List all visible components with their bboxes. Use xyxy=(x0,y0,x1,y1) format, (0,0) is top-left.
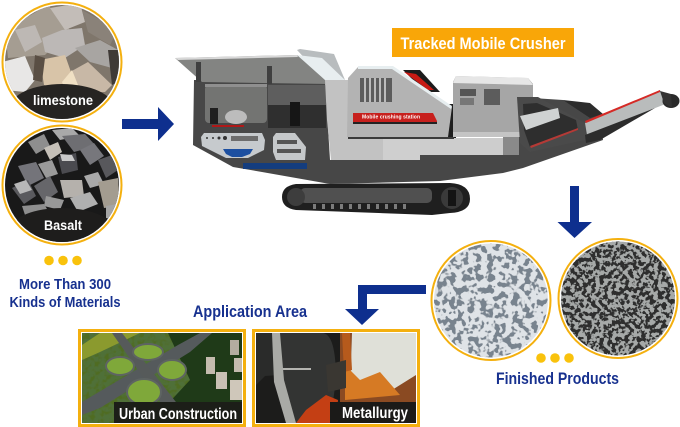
text: finished products: Finished Products xyxy=(496,369,619,388)
machine: chassis frame xyxy=(193,80,603,184)
arrow: products to application area xyxy=(345,285,426,325)
panel: urban construction xyxy=(80,330,244,426)
material: basalt xyxy=(2,126,122,248)
machine: tracked mobile crusher xyxy=(175,49,680,215)
material: limestone xyxy=(2,2,122,132)
machine: discharge housing xyxy=(517,97,603,152)
arrow: materials to crusher xyxy=(122,107,174,141)
text: more than 300 kinds of materials: More Than 300 xyxy=(19,276,111,293)
machine: feeder window xyxy=(205,84,326,128)
machine: central column xyxy=(325,80,383,160)
heading: application area: Application Area xyxy=(193,302,307,321)
text: more than 300 kinds of materials: Kinds of Materials xyxy=(10,294,120,311)
machine: dark gap behind housing xyxy=(444,104,456,140)
text: more than 300 kinds of materials xyxy=(10,276,120,311)
text: mobile crushing station: Mobile crushing station xyxy=(362,114,420,120)
title badge: tracked mobile crusher: Tracked Mobile Crusher xyxy=(400,34,566,53)
machine: hopper lid xyxy=(175,49,345,84)
label: metallurgy: Metallurgy xyxy=(342,405,408,422)
machine: lower covers xyxy=(348,137,519,160)
title badge: tracked mobile crusher xyxy=(392,28,574,57)
machine: engine enclosure xyxy=(453,76,533,137)
dots: more materials xyxy=(44,256,82,265)
product: dark gravel xyxy=(558,238,678,358)
dots: more products xyxy=(536,353,574,363)
machine: discharge conveyor xyxy=(585,90,680,143)
machine: red flywheel xyxy=(403,70,440,92)
arrow: crusher to products xyxy=(558,186,592,238)
label: urban construction: Urban Construction xyxy=(119,406,237,423)
product: white gravel xyxy=(431,240,551,360)
machine: control panels xyxy=(201,133,307,169)
machine: crusher housing xyxy=(347,66,452,137)
label: basalt: Basalt xyxy=(44,217,82,233)
panel: metallurgy xyxy=(254,330,418,426)
machine: track xyxy=(282,183,470,215)
label: limestone: limestone xyxy=(33,92,93,108)
